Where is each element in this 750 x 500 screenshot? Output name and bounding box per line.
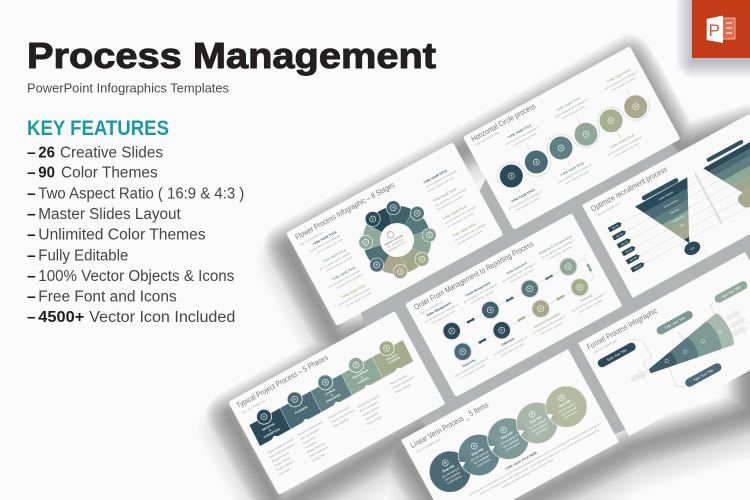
flower subtitle: Type Your Subtitle Here [299, 230, 325, 247]
order labels: Account Receivable [533, 312, 561, 329]
venn step text: Step #03 [500, 431, 514, 441]
badge shadow [694, 4, 750, 60]
horizontal text blocks: you are going to use a passage of [508, 190, 543, 211]
phase bullet lists: Approvals [278, 467, 291, 476]
venn step text: you are going to [441, 466, 460, 479]
phase bullet lists: Project Report [394, 383, 411, 394]
phase bullet lists: Quality Plan [311, 452, 326, 463]
venn bottom text: when an unknown printer took a galley of type. Lorem Ipsum is simply dummy text of the printing and typesetting [480, 428, 600, 496]
horizontal text blocks: TYPE YOUR TITLE [556, 96, 581, 112]
key features list: – [27, 268, 36, 285]
funnel one: Assessment [672, 214, 685, 223]
flower right text blocks: TYPE YOUR TITLE [452, 222, 477, 238]
key features list [27, 144, 244, 326]
order labels [421, 234, 608, 382]
panel: flower process [286, 142, 504, 326]
funnel subtitle: Type Your Subtitle Here [592, 338, 618, 355]
venn step text: Lorem Ipsum [533, 425, 550, 436]
order labels: Lorem Ipsum, you need [500, 342, 525, 358]
flower right text blocks: TYPE YOUR TITLE [432, 187, 457, 203]
flower right text blocks: you are going to use a passage [425, 169, 458, 189]
order labels: Order Execution [506, 261, 528, 275]
phase bullet lists: Recommended Solution [269, 442, 296, 459]
recruitment tags: Text 01 [611, 224, 620, 230]
key features list: 90 [38, 165, 55, 182]
order connector lines [452, 258, 594, 352]
flower right text blocks: of Lorem Ipsum, you need [447, 212, 474, 229]
flower left text blocks: you are going to use a passage [319, 252, 351, 271]
recruitment tags: Text 05 [629, 256, 638, 263]
venn circles [429, 386, 587, 492]
panel: horizontal circle process [463, 46, 681, 230]
funnel one output oval [682, 239, 703, 258]
venn step text: Lorem Ipsum [446, 474, 463, 485]
funnel title: Funnel Process Infographic [585, 306, 659, 352]
funnel connectors [629, 302, 717, 387]
phase bullet lists: Resource Requirement [297, 420, 323, 437]
venn step text: Lorem Ipsum [475, 457, 492, 468]
flower center label: you are going to [387, 238, 405, 249]
horizontal text blocks: TYPE YOUR TITLE [610, 133, 635, 150]
optimize title: Optimize recruitment process [589, 165, 669, 213]
flower right text blocks: you are going to use a passage [445, 205, 477, 225]
horizontal text blocks: you are going to use a passage of [558, 163, 592, 184]
phase blocks [249, 340, 414, 446]
phase labels: & [360, 375, 364, 380]
horizontal text blocks: Lorem Ipsum, you need [565, 170, 590, 185]
phase bullet lists: Feasibility Study [271, 450, 291, 463]
panel: typical project process [228, 311, 446, 495]
phase bullet lists: Team Meeting [333, 417, 350, 428]
subtitle: PowerPoint Infographics Templates [27, 80, 229, 96]
main title: Process Management [27, 35, 436, 76]
recruitment tags: Text 02 [615, 232, 624, 239]
order labels: Lorem Ipsum, you need [509, 269, 534, 284]
order labels: Invoicing [579, 293, 593, 303]
venn step text: you are going to [557, 401, 577, 414]
order labels: you are going to use a passage of [532, 314, 567, 335]
key features list: Creative Slides [60, 144, 163, 161]
flower left text blocks: of Lorem Ipsum, you need [336, 273, 363, 290]
order labels: Lorem Ipsum, you need [548, 245, 573, 261]
flower left text blocks: TYPE YOUR TITLE [341, 283, 366, 300]
venn card background [401, 349, 619, 500]
phase bullet lists: Project Initiation [276, 459, 295, 472]
key features list: – [27, 309, 36, 326]
phase bullet lists [266, 370, 418, 476]
flower right text blocks [423, 164, 489, 246]
venn step text: you are going to [499, 433, 519, 446]
phase labels [259, 352, 401, 439]
numbered circles [500, 95, 647, 188]
flower left text blocks: of Lorem Ipsum, you need [316, 238, 344, 255]
recruitment tags: Text 03 [620, 240, 629, 247]
key features list: – [27, 185, 36, 202]
order labels: you are going to use a passage of [502, 262, 537, 283]
venn bottom text: TYPE YOUR TITLE HERE [505, 451, 538, 471]
order labels: you are going to use a passage of [571, 292, 606, 313]
optimize card background [582, 114, 750, 298]
key features list: Vector Icon Included [89, 309, 235, 326]
phase bullet lists: Project Meeting [389, 373, 408, 386]
phase notches [270, 366, 403, 442]
horizontal text blocks: you are going to use a passage of [604, 70, 639, 91]
order subtitle: Type Your Subtitle Here [419, 299, 445, 316]
flower right text blocks: of Lorem Ipsum, you need [456, 229, 484, 246]
horizontal text blocks: Lorem Ipsum, you need [611, 77, 636, 92]
output arrows [724, 306, 750, 340]
flower right text blocks: of Lorem Ipsum, you need [427, 176, 455, 193]
key features list: – [27, 227, 36, 244]
optimize subtitle: Type Your Subtitle Here [595, 201, 622, 218]
flower left text blocks: you are going to use a passage [328, 269, 361, 289]
flower left text blocks: of Lorem Ipsum, you need [345, 291, 373, 308]
order labels: Order Management [426, 301, 452, 317]
horizontal text blocks: you are going to use a passage of [554, 98, 589, 119]
recruitment tags: Text 04 [625, 248, 634, 254]
panel: funnel process [578, 252, 750, 436]
phase labels: MONITORING [351, 368, 369, 380]
flower center label: INSIGHT OPTION [384, 234, 404, 247]
flower right text blocks: of Lorem Ipsum, you need [437, 194, 465, 211]
key features list: Unlimited Color Themes [38, 227, 206, 244]
phase bullet lists: Resource Allocation [328, 405, 351, 420]
venn step text: use a passage [503, 438, 520, 449]
funnel one header pill [641, 177, 679, 201]
flower left text blocks: TYPE YOUR TITLE [312, 230, 337, 246]
horizontal title: Horizontal Circle process [470, 101, 537, 144]
key features list: 4500+ [38, 309, 84, 326]
key features heading: KEY FEATURES [27, 117, 169, 140]
horizontal text blocks: Lorem Ipsum, you need [615, 142, 640, 158]
flower title: Flower Process Infographic – 8 Stages [294, 180, 396, 242]
order labels: you are going to use a passage of [424, 303, 459, 324]
horizontal text blocks: TYPE YOUR TITLE [507, 123, 532, 140]
venn step text: use a passage [561, 406, 578, 417]
funnel one: Phone Screen [663, 199, 679, 209]
phase bullet lists: Timeframe [304, 440, 317, 450]
venn step text: use a passage [531, 422, 548, 433]
order title: Order From Management to Reporting Process [412, 239, 535, 312]
phase labels: & [268, 428, 272, 432]
phase labels: CLOSURE [387, 355, 401, 365]
powerpoint badge [692, 0, 750, 58]
horizontal text blocks [502, 65, 644, 215]
funnel one: Offer [679, 223, 685, 228]
flower right text blocks: TYPE YOUR TITLE [442, 205, 467, 221]
horizontal text blocks: Lorem Ipsum, you need [515, 197, 540, 212]
venn step text: Step #02 [471, 447, 484, 457]
funnel one: Interview [670, 208, 680, 215]
phase bullet lists: Project Plan [302, 435, 317, 445]
phase bullet lists: Risk Assessment [309, 445, 329, 458]
venn subtitle: Type Your Subtitle Here [415, 437, 442, 454]
panel: order to reporting [405, 213, 623, 397]
phase bullet lists: Project Health Scorecard [266, 437, 295, 455]
funnel two output oval [738, 193, 750, 208]
key features list: – [27, 144, 36, 161]
venn bottom text: industry's standard dummy text ever since the 1500s. [502, 458, 555, 489]
venn step text: you are going to [528, 417, 547, 430]
project subtitle: Type Your Subtitle Here [241, 398, 267, 415]
order labels: Lorem Ipsum, you need [461, 364, 486, 379]
flower center label: passage of Lorem [388, 241, 407, 253]
venn step text: Lorem Ipsum [563, 409, 579, 420]
order labels: you are going to use a passage of [541, 239, 575, 260]
flower petal icons [359, 201, 436, 279]
venn step text: use a passage [444, 471, 461, 482]
flower right text blocks: you are going to use a passage [454, 223, 487, 242]
funnel card background [578, 252, 750, 436]
serpentine line [497, 100, 649, 183]
horizontal text blocks: you are going to use a passage of [505, 126, 540, 146]
order labels: Lorem Ipsum, you need [470, 290, 495, 305]
soft cluster shadow [228, 56, 750, 500]
funnel two [703, 142, 750, 198]
funnel one [635, 177, 689, 243]
order labels: you are going to use a passage of [493, 336, 528, 357]
horizontal text blocks: you are going to use a passage of [608, 136, 642, 156]
project title: Typical Project Process – 5 Phases [235, 353, 330, 410]
key features list: 100% Vector Objects & Icons [38, 268, 235, 285]
funnel two header pill [706, 139, 744, 163]
flower left text blocks: of Lorem Ipsum, you need [326, 256, 354, 272]
phase bullet lists: KPIs Dashboard [359, 400, 379, 413]
order labels: Reporting [462, 358, 476, 368]
order labels: Lorem Ipsum, you need [579, 299, 604, 314]
project card background [228, 311, 446, 495]
order labels: Lorem Ipsum, you need [431, 310, 456, 325]
venn step text: Step #05 [558, 399, 572, 409]
funnel one output oval: Hire [690, 246, 696, 251]
key features list: – [27, 165, 36, 182]
key features list: Free Font and Icons [38, 289, 177, 306]
phase labels: INITIATION [261, 422, 275, 432]
order card background [405, 213, 623, 397]
venn step text: Lorem Ipsum [505, 441, 521, 452]
funnel pills: Type Your Title [693, 368, 714, 382]
horizontal text blocks: TYPE YOUR TITLE [560, 161, 585, 177]
funnel pills: Type Your Title [664, 316, 686, 330]
flower right text blocks: you are going to use a passage [435, 188, 468, 207]
order nodes [443, 258, 589, 361]
venn step text: Step #04 [529, 415, 542, 425]
phase bullet lists: Timeline Review [362, 405, 381, 417]
key features list: Fully Editable [38, 247, 128, 264]
funnel pills [596, 280, 749, 388]
venn step text: you are going to [470, 449, 489, 462]
funnel one: Career Website [658, 191, 674, 201]
phase bullet lists: Monitoring Progress [357, 394, 380, 409]
panel: linear venn process [401, 349, 619, 500]
funnel pills: Type Your Title [606, 348, 628, 362]
order arrows [466, 263, 593, 345]
key features list: Color Themes [61, 165, 158, 182]
phase labels: & [330, 393, 334, 397]
key features list: Two Aspect Ratio ( 16:9 & 4:3 ) [38, 185, 244, 202]
phase bullet lists: Budget Planning [306, 441, 326, 454]
horizontal text blocks: Lorem Ipsum, you need [512, 132, 537, 148]
phase bullet lists: Project Documentation [330, 407, 356, 424]
key features list: Master Slides Layout [38, 206, 181, 223]
key features list: – [27, 289, 36, 306]
guide lines [622, 153, 750, 263]
flower left text blocks [306, 229, 373, 311]
horizontal text blocks: Lorem Ipsum, you need [561, 105, 586, 120]
panel: optimize recruitment [582, 114, 750, 298]
gap shading between cards [360, 130, 750, 490]
horizontal text blocks: TYPE YOUR TITLE [606, 68, 631, 84]
order labels: Credit Management [465, 281, 491, 298]
circle connectors [517, 89, 630, 194]
key features list: – [27, 206, 36, 223]
venn triangles [460, 412, 555, 467]
horizontal text blocks: TYPE YOUR TITLE [510, 188, 535, 204]
phase bullet lists: Contract Termination [392, 375, 416, 390]
input arrow [629, 366, 650, 386]
phase icons [256, 341, 394, 424]
flower left text blocks: TYPE YOUR TITLE [322, 248, 347, 264]
phase bullet lists: Status Report [366, 415, 383, 426]
flower card background [286, 142, 504, 326]
phase labels: LAUNCH [324, 387, 336, 396]
key features list: – [27, 247, 36, 264]
powerpoint badge: P [708, 21, 720, 40]
flower left text blocks: TYPE YOUR TITLE [331, 265, 356, 282]
phase labels: PROJECT [386, 352, 399, 362]
flower left text blocks: you are going to use a passage [338, 287, 371, 307]
key features list: 26 [38, 144, 55, 161]
phase bullet lists: Task Identification [299, 427, 320, 441]
horizontal funnel [649, 311, 737, 373]
recruitment tags [608, 221, 645, 273]
order labels: Shipping & Transportation [538, 234, 573, 256]
venn step text: Step #01 [442, 464, 455, 474]
venn title: Linear Venn Process _ 5 Items [409, 400, 490, 450]
flower right text blocks: TYPE YOUR TITLE [423, 169, 448, 185]
horizontal card background [463, 46, 681, 230]
phase labels: CONTROL [357, 375, 370, 385]
order labels: you are going to use a passage of [454, 357, 489, 378]
horizontal subtitle: Type Your Subtitle Here [474, 130, 500, 147]
flower ring [363, 206, 431, 274]
vertical arrow [695, 173, 722, 223]
venn step text: use a passage [473, 454, 490, 465]
venn bottom text: Lorem Ipsum is simply dummy text of the printing and typesetting industry. Lorem Ipsum has been the industry's standard dummy text [469, 422, 602, 497]
funnel pills: Type Your Title [720, 285, 742, 299]
phase labels: EXECUTION [326, 393, 341, 404]
phase bullet lists: Deliverables [364, 411, 379, 422]
order labels: you are going to use a passage of [463, 283, 498, 304]
phase labels: CONCEPTION [263, 427, 281, 439]
order labels: Collection [500, 337, 515, 347]
venn step text [435, 390, 580, 486]
flower center label [380, 227, 407, 253]
flower left text blocks: you are going to use a passage [309, 234, 342, 253]
phase labels: PLANNING [294, 405, 308, 415]
order labels: Lorem Ipsum, you need [539, 321, 564, 336]
phase bullet lists: Project Charter [273, 456, 291, 468]
recruitment tags: Text 06 [634, 264, 643, 271]
